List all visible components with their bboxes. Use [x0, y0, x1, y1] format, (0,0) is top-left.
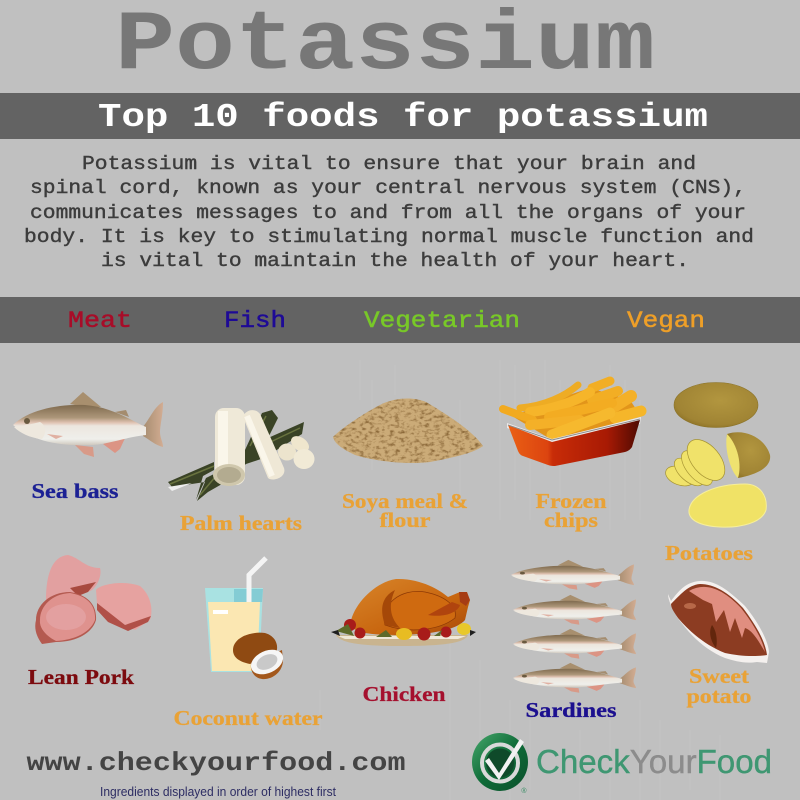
label: frozen chips — [536, 489, 607, 532]
intro paragraph: is vital to maintain the health of your heart. — [101, 250, 689, 272]
icon: sardines — [511, 560, 636, 693]
heading band — [0, 93, 800, 139]
icon: palm hearts — [168, 408, 314, 501]
legend: vegan: Vegan — [627, 308, 705, 334]
label: sardines: Sardines — [526, 698, 616, 722]
title: Potassium — [115, 0, 655, 94]
intro paragraph: spinal cord, known as your central nervous system (CNS), — [30, 177, 746, 199]
legend: meat: Meat — [68, 308, 132, 334]
icon: roast chicken — [331, 579, 476, 646]
logo: CheckYourFood — [472, 733, 772, 795]
label: coconut water: Coconut water — [174, 706, 322, 730]
icon: sweet potato — [668, 581, 769, 663]
label: chicken: Chicken — [362, 682, 446, 706]
label: sweet potato: potato — [686, 684, 752, 708]
label: palm hearts: Palm hearts — [180, 511, 302, 535]
legend band — [0, 297, 800, 343]
label: frozen chips: chips — [544, 508, 598, 532]
logo wordmark: CheckYourFood — [536, 743, 772, 780]
footnote: Ingredients displayed in order of highest first — [100, 785, 337, 799]
legend: vegetarian: Vegetarian — [364, 308, 520, 334]
label: lean pork: Lean Pork — [28, 665, 134, 689]
label: sweet potato — [686, 664, 752, 708]
icon: sea bass — [13, 392, 163, 457]
label: sweet potato: Sweet — [689, 664, 749, 688]
legend: fish: Fish — [224, 308, 286, 334]
intro paragraph: communicates messages to and from all the organs of your — [30, 202, 746, 224]
label: frozen chips: Frozen — [536, 489, 607, 513]
website url: www.checkyourfood.com — [26, 748, 406, 778]
label: soya meal and flour: flour — [380, 508, 430, 532]
intro paragraph: Potassium is vital to ensure that your brain and — [82, 153, 696, 175]
icon: frozen chips tray — [503, 381, 641, 466]
label: soya meal and flour — [342, 489, 468, 532]
icon: potatoes — [663, 382, 770, 527]
label: soya meal and flour: Soya meal & — [342, 489, 468, 513]
icon: soya meal pile — [333, 399, 483, 463]
label: sea bass: Sea bass — [32, 479, 118, 503]
logo badge: ® — [521, 787, 527, 795]
icon: coconut water — [205, 558, 287, 679]
heading: Top 10 foods for potassium — [98, 99, 708, 136]
logo badge — [472, 733, 528, 795]
label: potatoes: Potatoes — [665, 541, 753, 565]
icon: lean pork — [35, 555, 151, 644]
intro paragraph: body. It is key to stimulating normal muscle function and — [24, 226, 754, 248]
intro paragraph — [24, 153, 754, 272]
